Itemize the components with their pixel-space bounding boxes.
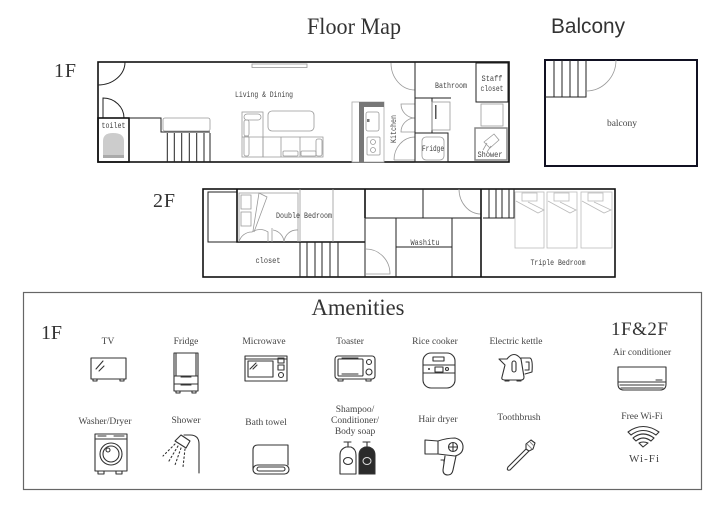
upper stairs	[483, 189, 514, 218]
amenity: Free Wi-Fi: Free Wi-Fi	[621, 412, 663, 422]
amenity: Microwave: Microwave	[242, 337, 286, 347]
top-left door	[98, 62, 125, 85]
amenity: Free Wi-Fi: Wi-Fi	[629, 453, 659, 465]
label: Living & Dining: Living & Dining	[235, 90, 293, 100]
amenity: Toaster	[335, 337, 375, 381]
staff closet	[476, 63, 508, 102]
bathroom: Bathroom	[435, 81, 467, 91]
amenity: Air conditioner	[613, 348, 672, 390]
amenity: Shampoo / Conditioner / Body soap: Body soap	[335, 427, 375, 437]
washer	[481, 104, 503, 126]
kitchen counter	[352, 102, 384, 162]
amenity: Fridge: Fridge	[174, 337, 198, 347]
amenity: Shower	[163, 416, 201, 473]
label: 1F: 1F	[54, 60, 76, 82]
floor plan: 2F	[203, 189, 615, 277]
washitu room	[365, 189, 481, 277]
amenity: Bath towel	[245, 418, 289, 474]
floor plan: 1F	[98, 62, 509, 162]
amenity: Rice cooker	[412, 337, 459, 388]
wall: washitu / triple bedroom	[480, 189, 482, 277]
window	[252, 64, 307, 68]
toilet room	[98, 98, 129, 162]
heading: Balcony: Balcony	[551, 15, 625, 38]
fridge space	[415, 133, 448, 162]
beds	[515, 192, 612, 248]
2F stairs	[300, 242, 338, 277]
amenity: TV: TV	[102, 337, 114, 347]
kitchen doors	[391, 63, 415, 160]
amenity: Shower: Shower	[171, 416, 201, 426]
panel: amenities	[24, 292, 702, 490]
balcony stairs	[545, 60, 586, 97]
double bedroom	[208, 189, 365, 242]
amenity: Toothbrush	[497, 413, 541, 470]
amenity: Hair dryer: Hair dryer	[418, 415, 458, 425]
label: Kitchen: Kitchen	[389, 115, 399, 143]
floor plan: balcony	[545, 60, 697, 166]
amenity: Free Wi-Fi	[621, 412, 663, 465]
amenity: Bath towel: Bath towel	[245, 418, 287, 428]
bathroom	[415, 81, 467, 133]
amenity: Electric kettle	[489, 337, 543, 381]
amenity: Electric kettle: Electric kettle	[489, 337, 543, 347]
washitu room: Washitu	[410, 238, 440, 248]
title: Floor Map: Floor Map	[307, 14, 401, 39]
balcony door	[586, 60, 616, 91]
amenity: Washer/Dryer: Washer/Dryer	[78, 417, 132, 427]
heading: Amenities: Amenities	[312, 295, 405, 320]
wall: kitchen / bathroom	[414, 62, 416, 162]
amenity: Shampoo / Conditioner / Body soap: Conditioner/	[331, 416, 379, 426]
double bedroom: Double Bedroom	[276, 211, 332, 221]
label: 1F: 1F	[41, 322, 62, 344]
shower room: Shower	[478, 150, 502, 160]
amenity: Toothbrush: Toothbrush	[497, 413, 541, 423]
amenity: Hair dryer	[418, 415, 463, 475]
stairs	[129, 118, 210, 162]
shower room	[475, 128, 507, 160]
label: 1F&2F: 1F&2F	[611, 319, 668, 340]
label: 2F: 2F	[153, 190, 175, 212]
toilet room: toilet	[102, 121, 126, 131]
amenity: Washer/Dryer	[78, 417, 132, 474]
staff closet: Staff	[482, 74, 502, 84]
amenity: Toaster: Toaster	[336, 337, 365, 347]
label: balcony: balcony	[607, 119, 637, 129]
amenity: Shampoo / Conditioner / Body soap: Shampoo/	[336, 405, 375, 415]
amenity: Shampoo / Conditioner / Body soap	[331, 405, 379, 474]
sofa and table	[242, 111, 323, 157]
amenity: TV	[91, 337, 126, 381]
amenity: Fridge	[174, 337, 198, 393]
fridge space: Fridge	[422, 144, 444, 154]
amenity: Air conditioner: Air conditioner	[613, 348, 672, 358]
closet label: closet	[256, 256, 280, 266]
amenity: Rice cooker: Rice cooker	[412, 337, 459, 347]
label: Triple Bedroom: Triple Bedroom	[530, 258, 586, 268]
amenity: Microwave	[242, 337, 287, 381]
staff closet: closet	[480, 84, 504, 94]
